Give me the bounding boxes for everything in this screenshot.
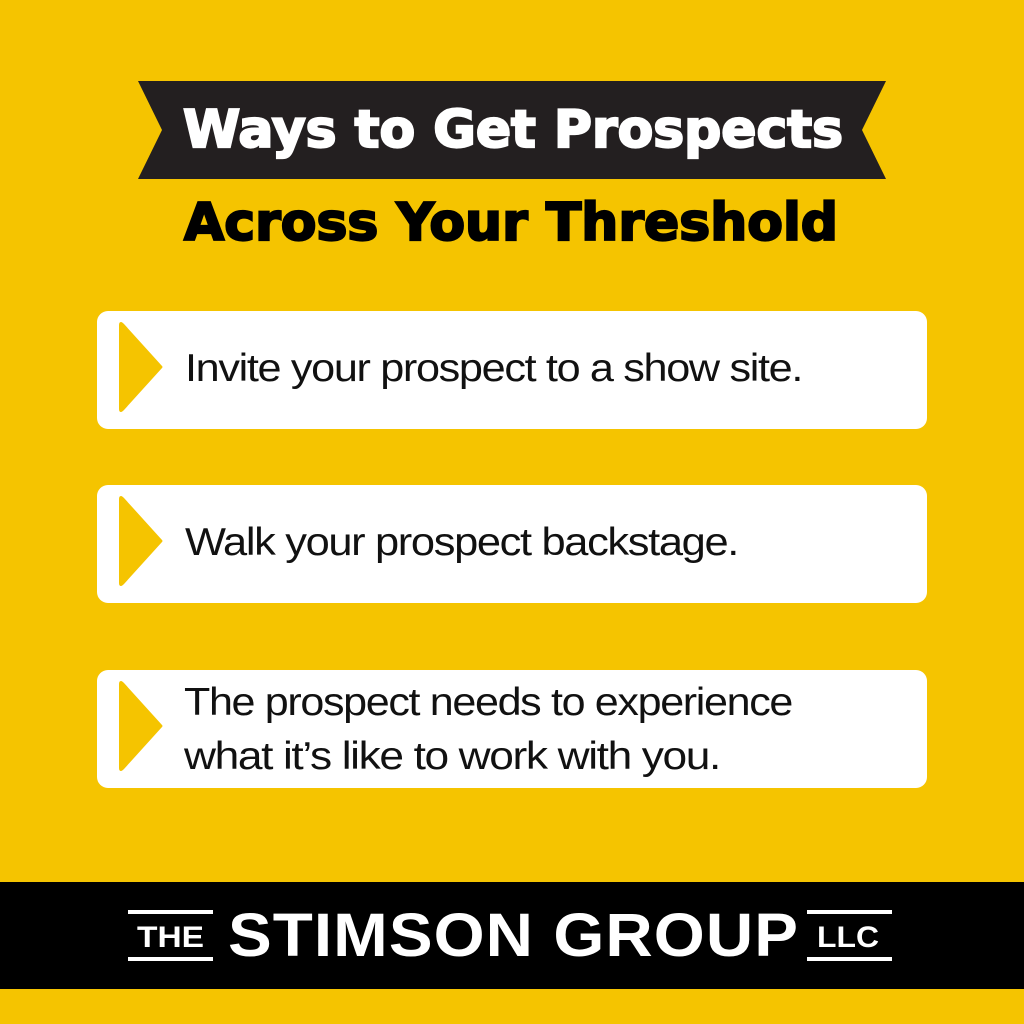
text: item 1: Invite your prospect to a show site. [185,347,802,390]
text: item 3: what it’s like to work with you. [183,735,720,778]
title banner: Ways to Get Prospects [183,100,843,160]
text: item 2: Walk your prospect backstage. [185,521,738,564]
footer band [0,882,1024,989]
panel: invite to show site [97,311,927,429]
logo: The Stimson Group LLC: STIMSON GROUP [228,901,799,969]
icon: arrow 2 [119,496,162,586]
text: item 3 [183,681,792,778]
icon: arrow 3 [119,681,162,771]
logo: The Stimson Group LLC: THE [137,921,204,954]
icon: arrow 1 [119,322,162,412]
logo: The Stimson Group LLC: LLC [817,921,879,954]
title banner [138,81,886,179]
panel: experience working with you [97,670,927,788]
panel: walk backstage [97,485,927,603]
text: item 3: The prospect needs to experience [184,681,792,724]
logo: The Stimson Group LLC [128,901,892,969]
subtitle: Across Your Threshold [184,193,838,253]
